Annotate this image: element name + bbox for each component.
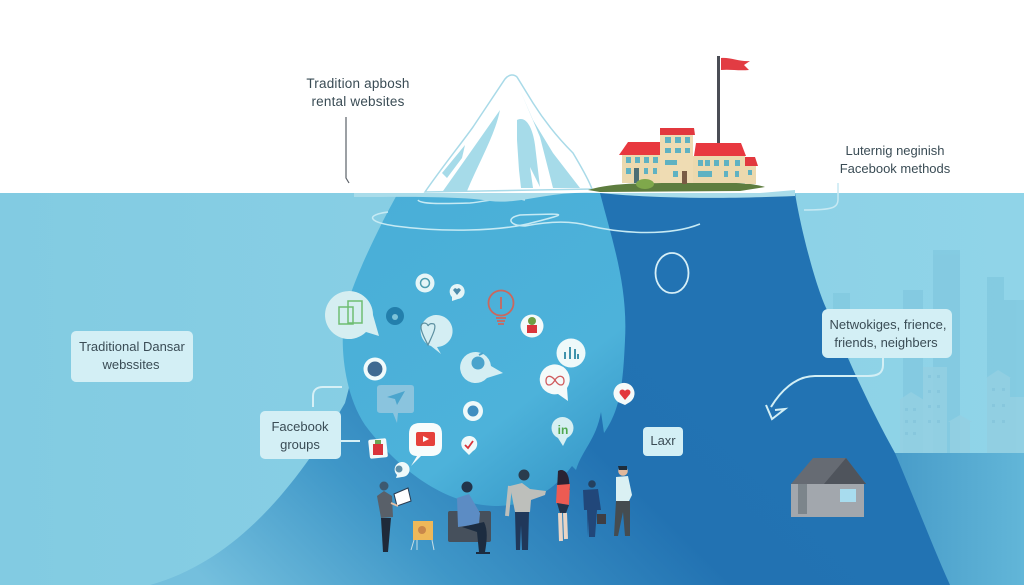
bubble: heart outline [421,315,453,354]
iceberg tip [425,75,592,192]
label: tradition rental websites [306,76,410,183]
callout: networks friends neighbors [822,309,952,358]
bubble: linkedin: in [558,423,568,437]
island with building [588,56,765,192]
woman in red [556,470,570,541]
bubble: small heart [450,284,465,301]
bubble: linkedin [552,417,574,446]
icon: house [791,458,866,517]
people group [377,466,632,553]
callout: facebook groups [260,387,360,459]
callout: traditional websites: Traditional Dansar [79,339,186,354]
bubble: small apple [463,401,483,421]
standing man [507,470,546,550]
bubble: send arrow [377,385,414,423]
icon: easel board [411,521,434,550]
bubble: green groups icon [325,291,379,339]
icon: ellipse outline [656,253,688,293]
bubble: round logo [416,274,434,292]
bubble: red app [368,438,388,459]
callout: Laxr [643,427,683,456]
bubble: youtube [409,423,442,466]
bubble: infinity [540,364,570,401]
bubble: small globe [395,462,410,478]
social bubbles [325,274,634,478]
city skyline [833,250,1024,453]
callout: networks friends neighbors: Netwokiges, frience, [829,317,947,332]
bubble: apple logo [460,352,503,383]
person with tablet [377,482,411,552]
dark underwater mound [150,193,950,585]
arrow to house [766,358,883,419]
label: tradition rental websites: rental websites [311,94,405,109]
callout: facebook groups: Facebook [271,419,329,434]
bubble: bar chart [556,338,586,368]
callout: facebook groups: groups [280,437,320,452]
label: tradition rental websites: Tradition apbosh [306,76,410,91]
callout: traditional websites [71,331,193,382]
man in white shirt [614,466,632,536]
man with briefcase [583,480,606,537]
callout: traditional websites: webssites [101,357,160,372]
bubble: check [461,436,477,455]
label: learning facebook methods: Facebook methods [840,161,951,176]
bubble: dark circle [364,358,386,380]
submerged iceberg [343,193,625,506]
bubble: heart [614,383,634,405]
label: learning facebook methods: Luternig neginish [845,143,945,158]
icon: light bulb [488,290,514,324]
label: learning facebook methods [804,143,951,210]
bubble: red plant pot [520,314,544,338]
callout: networks friends neighbors: friends, neighbers [834,335,938,350]
callout: Laxr: Laxr [650,433,676,448]
waterline foam [354,190,795,202]
bubble: dark drop [386,307,404,325]
water background [0,193,1024,585]
seated man on sofa [448,482,491,553]
waterline swirls [373,198,700,232]
